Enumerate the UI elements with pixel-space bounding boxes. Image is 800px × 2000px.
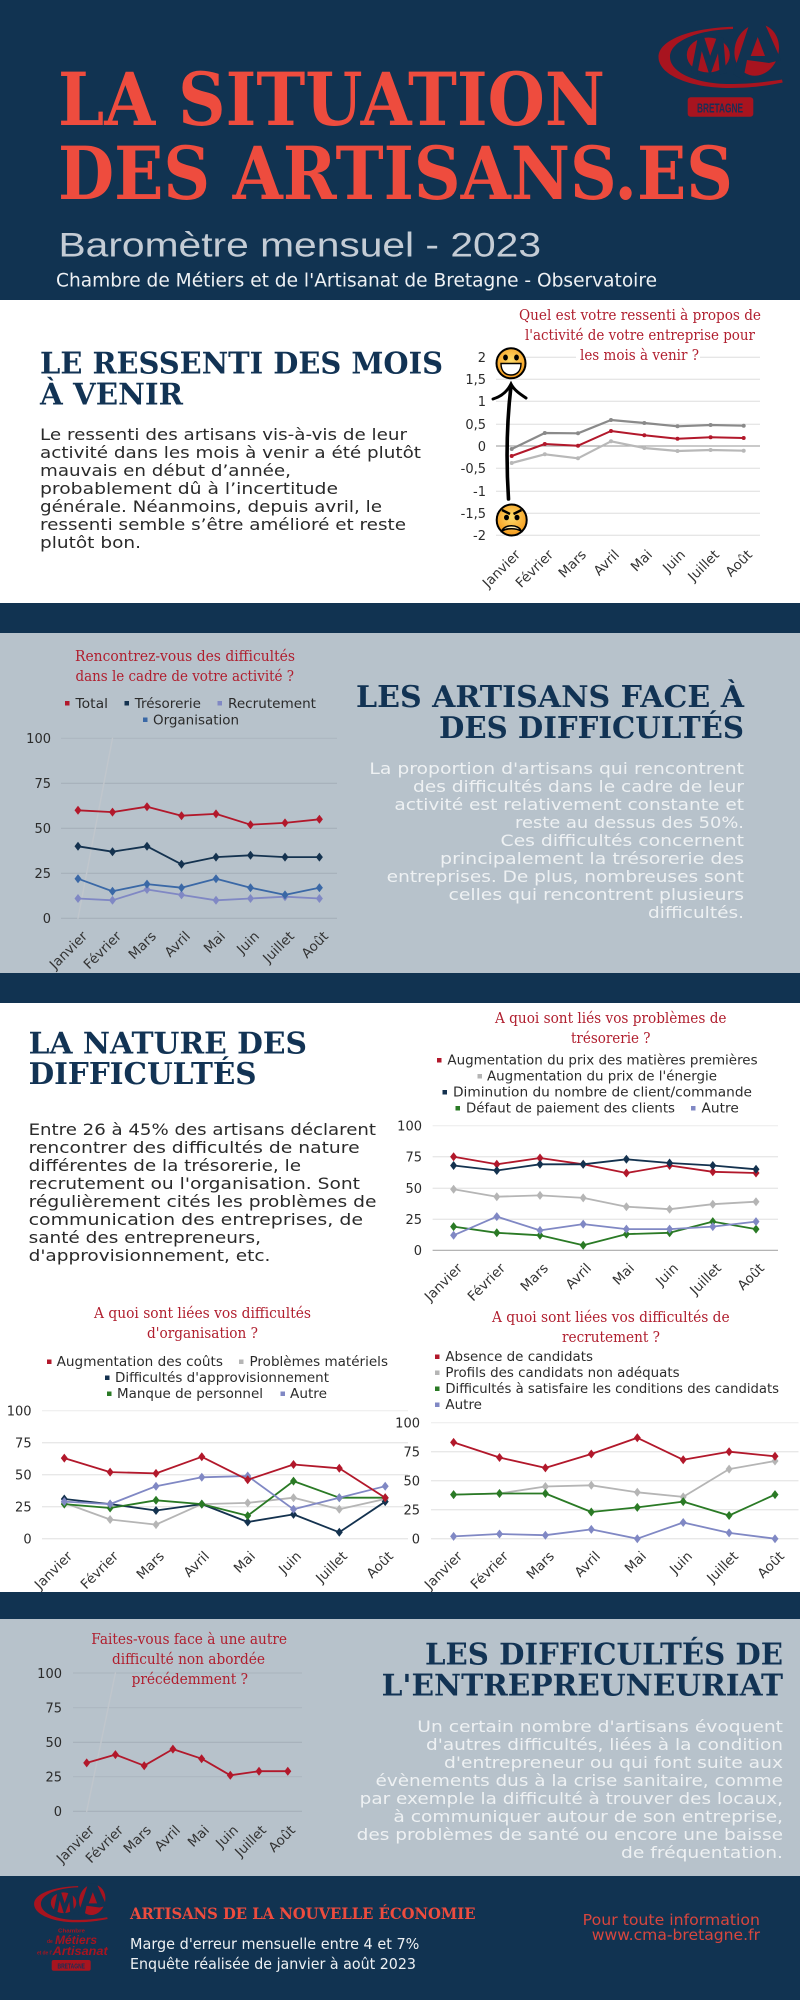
- text block: activité est relativement constante et: [394, 795, 744, 814]
- text block: différentes de la trésorerie, le: [29, 1156, 301, 1175]
- panel: les difficultés de l'entrepreneuriat: [0, 1619, 800, 1876]
- line chart: organisation: Février: [78, 1548, 122, 1593]
- panel: le ressenti des mois à venir: [0, 300, 800, 603]
- chart title: [519, 307, 761, 364]
- line chart: ressenti: 1,5: [465, 373, 486, 388]
- line chart: organisation: 50: [15, 1468, 32, 1484]
- line chart: recrutement: 0: [412, 1532, 420, 1548]
- line chart: organisation: Août: [364, 1549, 397, 1582]
- line chart: ressenti: -0,5: [461, 462, 486, 477]
- text block: à communiquer autour de son entreprise,: [393, 1807, 783, 1826]
- line chart: difficultés: 0: [43, 912, 51, 927]
- heading: DIFFICULTÉS: [29, 1056, 257, 1092]
- line chart: trésorerie: 75: [405, 1150, 422, 1166]
- heading: LES DIFFICULTÉS DE: [425, 1636, 783, 1672]
- line chart: ressenti: 2: [478, 351, 486, 366]
- chart title: recrutement: A quoi sont liées vos difficultés de: [491, 1310, 730, 1326]
- legend: recrutement: Profils des candidats non adéquats: [445, 1365, 680, 1381]
- text block: générale. Néanmoins, depuis avril, le: [40, 497, 382, 516]
- legend: organisation: Autre: [290, 1386, 327, 1402]
- line chart: autre difficulté: Février: [83, 1822, 127, 1867]
- legend: trésorerie: [437, 1052, 758, 1116]
- line chart: ressenti: 0,5: [465, 418, 486, 433]
- line chart: difficultés: Août: [299, 929, 332, 962]
- text block: des problèmes de santé ou encore une baisse: [357, 1825, 783, 1844]
- text block: entreprises. De plus, nombreuses sont: [387, 867, 744, 886]
- line chart: trésorerie: Juillet: [686, 1261, 725, 1299]
- chart title: Rencontrez-vous des difficultés: [75, 649, 295, 665]
- band: [0, 973, 800, 1003]
- line chart: autre difficulté: 25: [45, 1770, 62, 1786]
- title: DES ARTISANS.ES: [58, 131, 733, 217]
- line chart: autre difficulté: Juin: [212, 1823, 242, 1852]
- text block: Entre 26 à 45% des artisans déclarent: [29, 1120, 376, 1139]
- line chart: difficultés: Février: [81, 928, 125, 973]
- line chart: trésorerie: 100: [397, 1120, 422, 1134]
- legend: trésorerie: Défaut de paiement des clients: [466, 1100, 675, 1116]
- band: [0, 603, 800, 633]
- chart title: Quel est votre ressenti à propos de: [519, 307, 761, 324]
- line chart: recrutement: Avril: [572, 1549, 604, 1581]
- organisation line: Chambre de Métiers et de l'Artisanat de Bretagne - Observatoire: [56, 270, 657, 292]
- logo: CMA footer: et de l': [37, 1950, 52, 1956]
- line chart: recrutement: Juillet: [703, 1549, 742, 1587]
- text block: de fréquentation.: [621, 1843, 783, 1862]
- line chart: ressenti: Juillet: [684, 547, 723, 585]
- line chart: trésorerie: [397, 1120, 778, 1305]
- contact: Pour toute information: [583, 1911, 760, 1929]
- legend: organisation: Difficultés d'approvisionnement: [115, 1370, 329, 1386]
- line chart: recrutement: Janvier: [421, 1548, 466, 1593]
- icon: happy face: [496, 348, 526, 378]
- line chart: autre difficulté: 75: [45, 1702, 62, 1716]
- text block: santé des entrepreneurs,: [29, 1228, 261, 1247]
- chart title: les mois à venir ?: [580, 347, 699, 364]
- line chart: organisation: Mai: [231, 1549, 259, 1577]
- line chart: difficultés: Janvier: [46, 928, 91, 973]
- line chart: organisation: 100: [7, 1404, 32, 1420]
- text block: La proportion d'artisans qui rencontrent: [369, 759, 744, 778]
- logo: CMA footer: Chambre: [58, 1928, 85, 1934]
- footer note: Enquête réalisée de janvier à août 2023: [130, 1955, 416, 1973]
- heading: [356, 679, 745, 746]
- heading: [29, 1026, 307, 1092]
- text block: régulièrement cités les problèmes de: [29, 1192, 376, 1211]
- chart title: organisation: d'organisation ?: [147, 1326, 258, 1342]
- chart title: Faites-vous face à une autre: [91, 1631, 287, 1648]
- text block: évènements dus à la crise sanitaire, comme: [376, 1771, 783, 1790]
- text block: principalement la trésorerie des: [440, 849, 744, 868]
- line chart: difficultés: 100: [26, 732, 51, 747]
- panel: header: [0, 0, 800, 300]
- line chart: trésorerie: 25: [405, 1213, 422, 1228]
- line chart: ressenti: Mars: [556, 547, 590, 581]
- line chart: difficultés: 75: [34, 777, 51, 792]
- line chart: organisation: Janvier: [31, 1548, 76, 1593]
- line chart: recrutement: 75: [403, 1446, 420, 1460]
- line chart: difficultés: 50: [34, 822, 51, 837]
- line chart: organisation: 25: [15, 1500, 32, 1516]
- line chart: autre difficulté: Juillet: [231, 1823, 270, 1861]
- logo: CMA Bretagne: [658, 19, 785, 117]
- legend: Trésorerie: [134, 696, 201, 712]
- line chart: recrutement: Août: [755, 1549, 788, 1582]
- line chart: ressenti: Avril: [591, 547, 623, 579]
- subtitle: Baromètre mensuel - 2023: [58, 227, 541, 265]
- line chart: trésorerie: Février: [465, 1260, 509, 1305]
- line chart: ressenti: -2: [473, 529, 486, 544]
- line chart: recrutement: 100: [395, 1416, 420, 1432]
- legend: Recrutement: [228, 696, 316, 712]
- legend: trésorerie: Augmentation du prix de l'énergie: [487, 1068, 717, 1084]
- arrow: up from sad to happy: [493, 384, 526, 499]
- heading: LA NATURE DES: [29, 1026, 307, 1061]
- line chart: recrutement: Février: [468, 1548, 512, 1593]
- line chart: recrutement: Mai: [622, 1549, 650, 1577]
- line chart: trésorerie: 50: [405, 1182, 422, 1197]
- text block: d'approvisionnement, etc.: [29, 1246, 270, 1265]
- line chart: trésorerie: Avril: [563, 1261, 595, 1293]
- legend: organisation: [47, 1354, 388, 1402]
- text block: probablement dû à l’incertitude: [40, 479, 338, 498]
- line chart: organisation: Mars: [134, 1549, 168, 1583]
- line chart: autre difficulté: Janvier: [53, 1822, 98, 1867]
- legend: Organisation: [153, 712, 239, 728]
- line chart: organisation: Juillet: [312, 1549, 351, 1587]
- line chart: trésorerie: 0: [414, 1244, 422, 1259]
- text block: mauvais en début d’année,: [40, 461, 291, 480]
- text block: celles qui rencontrent plusieurs: [448, 885, 744, 904]
- band: [0, 1592, 800, 1619]
- chart title: recrutement: recrutement ?: [562, 1330, 660, 1346]
- line chart: ressenti: Mai: [628, 547, 656, 575]
- line chart: recrutement: Mars: [524, 1549, 558, 1583]
- line chart: autre difficulté: Août: [266, 1823, 299, 1856]
- heading: L'ENTREPREUNEURIAT: [382, 1669, 784, 1704]
- line chart: difficultés: [26, 732, 337, 973]
- panel: la nature des difficultés: [0, 1003, 800, 1593]
- text block: Le ressenti des artisans vis-à-vis de leur: [40, 425, 407, 444]
- legend: organisation: Manque de personnel: [117, 1386, 263, 1402]
- line chart: ressenti: Août: [723, 547, 756, 580]
- heading: LE RESSENTI DES MOIS: [40, 346, 443, 382]
- line chart: trésorerie: Juin: [652, 1261, 682, 1290]
- text block: d'autres difficultés, liées à la condition: [426, 1735, 783, 1754]
- heading: LES ARTISANS FACE À: [356, 679, 745, 715]
- contact: [583, 1911, 761, 1944]
- legend: trésorerie: Diminution du nombre de client/commande: [453, 1084, 752, 1100]
- legend: trésorerie: Augmentation du prix des matières premières: [447, 1052, 758, 1068]
- logo: CMA footer: BRETAGNE: [58, 1961, 85, 1970]
- chart title: l'activité de votre entreprise pour: [525, 328, 755, 344]
- chart title: trésorerie: A quoi sont liés vos problèmes de: [494, 1011, 726, 1027]
- text block: par exemple la difficulté à trouver des locaux,: [360, 1789, 783, 1808]
- line chart: difficultés: Juillet: [259, 929, 298, 967]
- line chart: autre difficulté: 100: [37, 1667, 62, 1682]
- chart title: organisation: A quoi sont liées vos difficultés: [93, 1306, 311, 1322]
- legend: recrutement: Absence de candidats: [445, 1349, 593, 1365]
- line chart: trésorerie: Mars: [518, 1261, 552, 1295]
- legend: recrutement: Autre: [445, 1397, 482, 1413]
- text block: Un certain nombre d'artisans évoquent: [417, 1717, 783, 1736]
- line chart: trésorerie: Mai: [610, 1261, 638, 1289]
- line chart: autre difficulté: Mai: [185, 1823, 213, 1851]
- chart title: [91, 1631, 287, 1688]
- line chart: ressenti: -1,5: [461, 507, 486, 522]
- panel: les artisans face à des difficultés: [0, 633, 800, 973]
- contact: www.cma-bretagne.fr: [592, 1926, 761, 1944]
- line chart: ressenti: Juin: [659, 547, 689, 577]
- line chart: recrutement: 50: [403, 1474, 420, 1490]
- chart title: [75, 649, 295, 685]
- text block: Ces difficultés concernent: [500, 831, 744, 850]
- text block: [357, 1717, 783, 1862]
- line chart: ressenti: Janvier: [479, 547, 524, 592]
- text block: [29, 1120, 376, 1265]
- logo: CMA Bretagne: BRETAGNE: [697, 100, 743, 116]
- text block: plutôt bon.: [40, 533, 141, 552]
- chart title: recrutement: [491, 1310, 730, 1346]
- legend: Total: [74, 696, 108, 712]
- legend: organisation: Augmentation des coûts: [57, 1354, 223, 1370]
- title: [58, 57, 733, 217]
- text block: rencontrer des difficultés de nature: [29, 1138, 360, 1157]
- heading: [39, 346, 443, 413]
- line chart: autre difficulté: Mars: [121, 1823, 155, 1857]
- heading: [382, 1636, 784, 1704]
- line chart: difficultés: Avril: [162, 929, 194, 961]
- line chart: autre difficulté: [37, 1667, 302, 1867]
- logo: CMA footer: Métiers: [55, 1933, 97, 1947]
- line chart: organisation: 75: [15, 1436, 32, 1452]
- footer heading: ARTISANS DE LA NOUVELLE ÉCONOMIE: [129, 1903, 476, 1923]
- chart title: trésorerie: [494, 1011, 726, 1047]
- text block: difficultés.: [648, 903, 744, 922]
- icon: angry face: [497, 504, 527, 536]
- chart title: trésorerie: trésorerie ?: [571, 1031, 651, 1047]
- line chart: difficultés: 25: [34, 867, 51, 882]
- line chart: ressenti: 0: [478, 440, 486, 455]
- chart title: difficulté non abordée: [112, 1652, 265, 1668]
- legend: recrutement: [435, 1349, 779, 1413]
- logo: CMA footer: [34, 1882, 109, 1971]
- legend: recrutement: Difficultés à satisfaire les conditions des candidats: [445, 1381, 779, 1397]
- chart title: dans le cadre de votre activité ?: [76, 669, 294, 685]
- text block: d'entrepreneur ou qui font suite aux: [444, 1753, 783, 1772]
- text block: ressenti semble s’être amélioré et reste: [40, 515, 406, 534]
- chart title: organisation: [93, 1306, 311, 1342]
- line chart: ressenti: Février: [513, 547, 557, 591]
- panel: footer: [0, 1876, 800, 2000]
- chart title: précédemment ?: [132, 1672, 248, 1688]
- legend: [65, 696, 316, 728]
- line chart: recrutement: Juin: [666, 1549, 696, 1578]
- text block: communication des entreprises, de: [29, 1210, 363, 1229]
- text block: recrutement ou l'organisation. Sont: [29, 1174, 360, 1193]
- line chart: autre difficulté: 50: [45, 1736, 62, 1751]
- line chart: organisation: 0: [23, 1532, 32, 1548]
- heading: DES DIFFICULTÉS: [439, 710, 744, 746]
- line chart: autre difficulté: Avril: [152, 1823, 184, 1855]
- text block: [369, 759, 744, 922]
- legend: trésorerie: Autre: [702, 1100, 739, 1116]
- text block: reste au dessus des 50%.: [515, 813, 744, 832]
- line chart: organisation: Juin: [275, 1549, 305, 1578]
- legend: organisation: Problèmes matériels: [250, 1354, 388, 1370]
- line chart: difficultés: Juin: [233, 929, 263, 958]
- line chart: ressenti: 1: [478, 395, 486, 410]
- text block: activité dans les mois à venir a été plutôt: [40, 443, 421, 462]
- line chart: ressenti: [461, 351, 760, 592]
- line chart: organisation: Avril: [181, 1549, 213, 1581]
- footer note: Marge d'erreur mensuelle entre 4 et 7%: [130, 1935, 419, 1953]
- line chart: trésorerie: Janvier: [421, 1260, 466, 1305]
- line chart: difficultés: Mai: [201, 929, 229, 957]
- line chart: difficultés: Mars: [126, 929, 160, 963]
- line chart: ressenti: -1: [473, 485, 486, 500]
- text block: [40, 425, 421, 552]
- line chart: autre difficulté: 0: [54, 1805, 62, 1820]
- title: LA SITUATION: [58, 57, 605, 143]
- heading: À VENIR: [39, 377, 184, 413]
- footer note: [130, 1935, 419, 1973]
- logo: CMA footer: Artisanat: [52, 1944, 109, 1958]
- logo: CMA footer: de: [47, 1939, 53, 1945]
- text block: des difficultés dans le cadre de leur: [413, 777, 744, 796]
- line chart: trésorerie: Août: [735, 1261, 768, 1294]
- line chart: recrutement: 25: [403, 1504, 420, 1518]
- line chart: recrutement: [395, 1416, 798, 1593]
- line chart: organisation: [7, 1404, 408, 1593]
